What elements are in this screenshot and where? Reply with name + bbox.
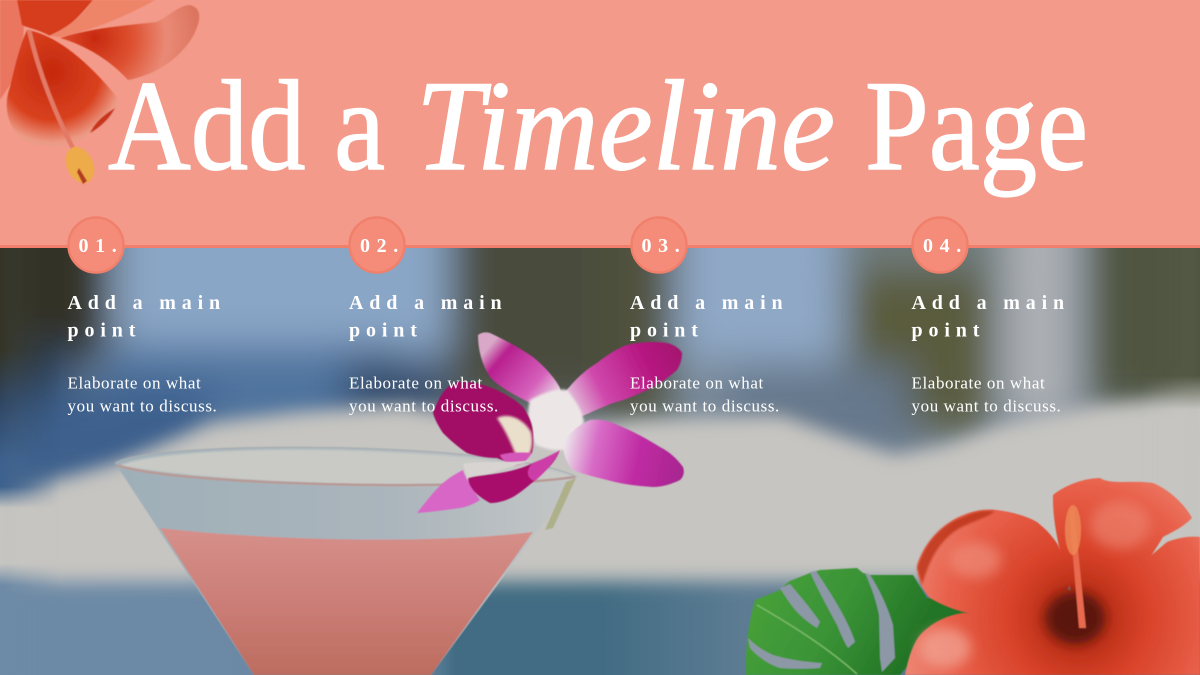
step 2 number badge: 02. bbox=[360, 235, 405, 257]
step 1 heading: point bbox=[68, 320, 141, 342]
step 3 number badge bbox=[632, 218, 686, 272]
hibiscus flower: bottom right bbox=[905, 478, 1200, 675]
step 1 bbox=[68, 218, 226, 416]
header band bbox=[0, 0, 1200, 246]
title: Page bbox=[865, 54, 1088, 197]
step 2 heading: point bbox=[349, 320, 423, 342]
step 3 heading: Add a main bbox=[630, 292, 789, 314]
step 3 number badge: 03. bbox=[642, 235, 686, 257]
cocktail glass bbox=[115, 447, 577, 675]
step 4 heading: point bbox=[912, 320, 985, 342]
orchid flower bbox=[417, 332, 684, 513]
step 3 heading: point bbox=[630, 320, 704, 342]
header band border bbox=[0, 245, 1200, 248]
step 4 description: you want to discuss. bbox=[912, 396, 1061, 416]
step 1 heading: Add a main bbox=[68, 292, 226, 314]
hibiscus flower: top left bbox=[0, 0, 199, 188]
step 3 description: Elaborate on what bbox=[630, 374, 764, 392]
step 1 number badge: 01. bbox=[78, 235, 123, 257]
step 4 bbox=[912, 218, 1070, 416]
monstera leaf bbox=[746, 568, 975, 675]
title: Timeline bbox=[416, 54, 835, 197]
step 1 number badge bbox=[68, 218, 124, 272]
step 2 description: Elaborate on what bbox=[349, 374, 483, 392]
background photo: blurred poolside bbox=[0, 248, 1200, 675]
step 2 description: you want to discuss. bbox=[349, 396, 499, 416]
step 1 description: you want to discuss. bbox=[68, 396, 217, 416]
step 4 number badge: 04. bbox=[923, 235, 968, 257]
step 3 description: you want to discuss. bbox=[630, 396, 780, 416]
step 1 description: Elaborate on what bbox=[68, 374, 201, 392]
step 2 heading: Add a main bbox=[349, 292, 508, 314]
title bbox=[108, 54, 1088, 197]
title: Add a bbox=[108, 54, 385, 197]
step 4 heading: Add a main bbox=[912, 292, 1070, 314]
step 3 bbox=[630, 218, 789, 416]
step 2 number badge bbox=[350, 218, 405, 272]
step 2 bbox=[349, 218, 508, 416]
step 4 number badge bbox=[912, 218, 968, 272]
step 4 description: Elaborate on what bbox=[912, 374, 1045, 392]
